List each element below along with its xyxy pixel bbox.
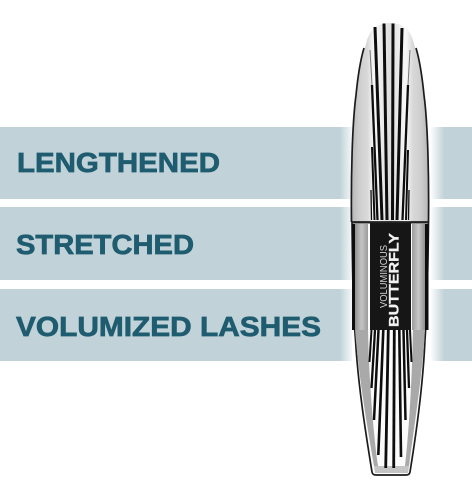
label text: butterfly: BUTTERFLY [386,233,402,327]
heading: stretched: STRETCHED [16,229,194,260]
band: stretched [0,207,472,280]
black label panel [370,223,411,330]
mascara tube [351,23,429,475]
band: volumized lashes [0,289,472,361]
tube base [374,466,409,473]
collar left side [352,224,355,330]
band: lengthened [0,127,472,199]
heading: lengthened: LENGTHENED [17,147,220,178]
upper stripes [370,24,410,220]
mascara upper cap [351,23,429,222]
label text: voluminous: VOLUMINOUS [378,245,390,308]
lower stripes [370,330,412,468]
lower tube outline and silver [352,222,428,475]
lower left grey band [355,329,378,466]
collar divider [352,222,428,224]
collar right side [412,224,425,330]
cap edge lines [351,48,429,222]
lower right grey band [405,329,425,466]
heading: volumized lashes: VOLUMIZED LASHES [16,311,321,342]
